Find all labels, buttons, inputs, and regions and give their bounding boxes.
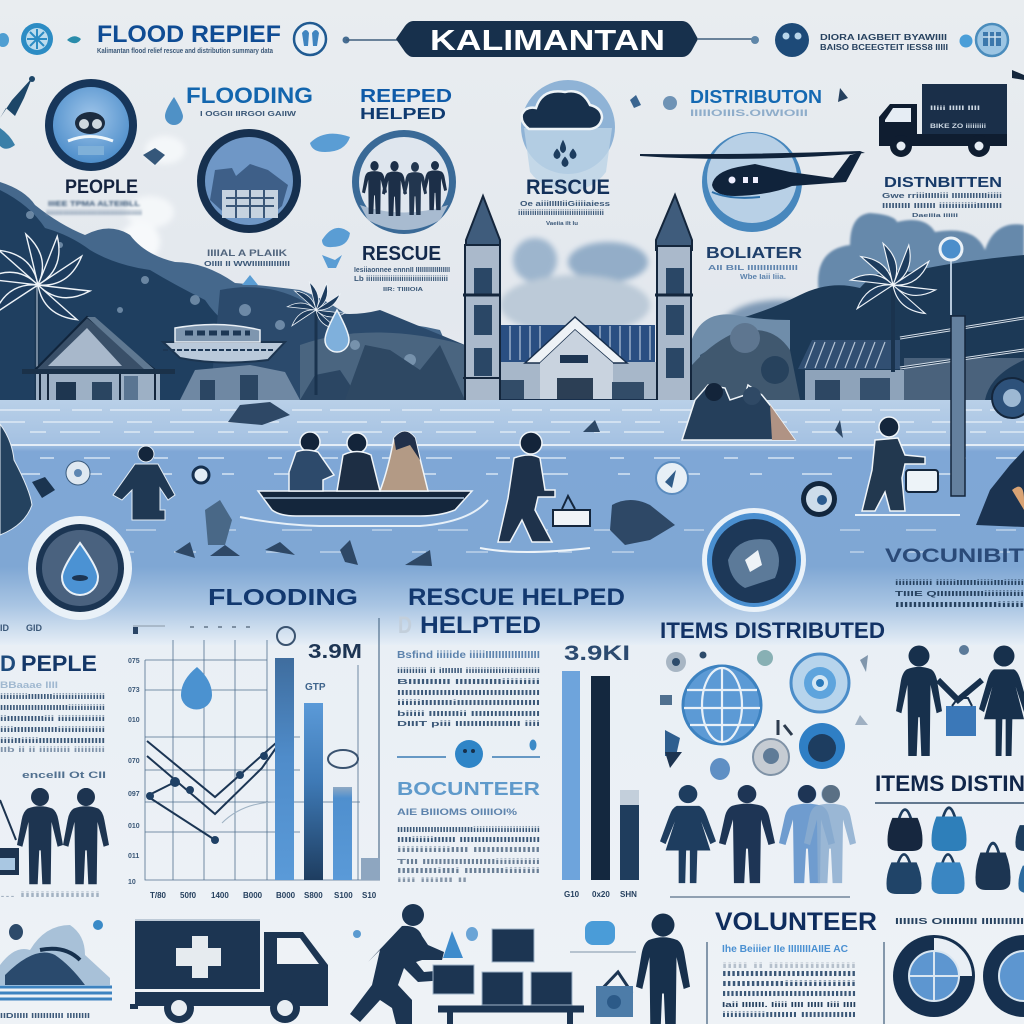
text: volunteer note: AII BIL IIIIIIIIIIIIIIII xyxy=(708,265,798,272)
text: rescue note xyxy=(354,267,450,293)
palm tree left xyxy=(0,232,90,400)
text: rescue helped detail xyxy=(397,650,540,728)
palm tree right xyxy=(850,241,936,372)
heading: helped: REEPED xyxy=(360,86,452,106)
icon: group of four people xyxy=(660,785,856,897)
hill mottling xyxy=(26,211,416,366)
icon: delivery truck top: BIKE ZO iiiiiiiii xyxy=(930,124,986,130)
text: volunteer detail: IIIIIIIIIIIIIIIIIIIIIIIIIiiiiiiiiiiiiiiiiiiiiii xyxy=(397,827,540,834)
text: people detail: IIIIIIIIIIIIIIIIIIIIIIiiiiiiiiiiii xyxy=(0,705,105,712)
text: people detail: BBaaae IIII xyxy=(0,680,58,690)
title: flood relief: FLOOD REPIEF xyxy=(97,21,281,48)
legend marks at left: GID xyxy=(26,623,43,633)
text: people detail: iiiiIIIIIIIIIIIIIiiiiiiiiiiiiii xyxy=(0,727,105,734)
icon: target disc cut xyxy=(983,935,1024,1017)
heading: distribution: DISTNBITTEN xyxy=(884,174,1002,191)
panel: people circle xyxy=(45,79,138,198)
text: volunteer note xyxy=(708,265,798,281)
text: people detail: IIb ii ii iiiiiiiii iiiiiiiii xyxy=(0,747,105,754)
text: rescue helped detail: iiiiiiIIIIIIIIiIIIIIIIIIIIIIIIIIIIII xyxy=(397,700,540,707)
icon: face badge xyxy=(775,23,809,57)
text: rescue helped detail: iiiiiiiiii ii iIIIIIII iiiiiiiiiiiiiiiiiiiiiiiii xyxy=(397,668,540,675)
chart y labels: 010 xyxy=(128,823,140,830)
chart y labels: 10 xyxy=(128,879,136,886)
icon: volunteer divider xyxy=(397,740,540,768)
text: volunteer banner: iiiiiiiiiii iiiiiiIIIIIIiiiiiIIIiiiiii xyxy=(895,580,1024,587)
right dark hills xyxy=(735,255,1024,405)
panel: flood water xyxy=(0,400,1024,645)
small icons xyxy=(660,650,868,780)
scene: buildings xyxy=(0,195,1024,402)
icon: standing volunteer xyxy=(636,914,690,1024)
text: volunteer banner: VOCUNIBIT xyxy=(885,546,1024,567)
icon: rain cloud xyxy=(521,80,615,191)
title banner xyxy=(396,21,698,57)
chart x labels: 50f0 xyxy=(180,891,197,900)
heading: volunteer: BOCUNTEER xyxy=(397,779,540,799)
chart: relief bars xyxy=(562,642,639,899)
icon: relief emblem xyxy=(294,23,326,55)
text: small caption: IIIIIIS OIIIIIIIII IIIIIIIIIII xyxy=(895,917,1024,926)
icon: delivery truck top xyxy=(879,84,1007,157)
icon: flooded city disc xyxy=(197,129,301,233)
panel: volunteer text: Iaii IIIIIII. Iiiii IIII IIIII Iiii IIII xyxy=(722,1002,856,1009)
chart x labels xyxy=(150,891,377,900)
icon: left kite ornaments xyxy=(0,76,35,149)
heading: helped: HELPED xyxy=(360,106,446,123)
text: volunteer banner: IIIIIIIIIIIIIIIIIIIIIIIiiiiii xyxy=(895,602,1024,609)
heading: volunteer: VOLUNTEER xyxy=(715,908,877,936)
icon: volunteer carrying parcels xyxy=(350,904,478,1024)
title banner: KALIMANTAN xyxy=(430,25,665,57)
bar labels: SHN xyxy=(620,890,637,899)
raft group xyxy=(682,383,795,440)
background landscape: hills and clouds xyxy=(0,136,1024,405)
icon: two volunteers xyxy=(0,788,109,884)
heading: distribution: IIIIIIIII IIIIIII iiiiiiiiiiiiIIIIIIII xyxy=(882,203,1002,210)
icon: water drop xyxy=(165,97,183,125)
heading: distribution: Gwe rriiiIIIIIiii IIIIIIIIIIIIiiiii xyxy=(882,193,1002,200)
icon: camera badge xyxy=(753,739,789,775)
heading: flooding: FLOODING xyxy=(186,83,313,108)
text: city note: OIIII II WWIIIIIIIIIIIIII xyxy=(204,261,290,268)
heading: helped xyxy=(360,86,452,123)
cloud puffs xyxy=(120,136,840,360)
header note xyxy=(820,33,948,52)
line markers xyxy=(146,730,288,844)
heading: distribution: IIIIIOIIIS.OIWIOIII xyxy=(690,108,808,118)
text: people detail: iiiiiiiiiIIIIIIIIiiiiiiiiiiiiiiiii xyxy=(0,694,105,701)
heading: people: PEPLE xyxy=(21,651,97,676)
right cloud bank xyxy=(818,213,1024,340)
small floating rings xyxy=(32,461,837,517)
connector left xyxy=(342,36,400,44)
icon: cargo emblem bottom left: IIDIIIII IIIIIIIIIII IIIIIIII xyxy=(0,1013,90,1020)
icon: drop on chart xyxy=(181,667,212,709)
house left xyxy=(22,317,175,402)
icon: blue dot and building badge xyxy=(960,24,1008,56)
wading man right xyxy=(855,417,960,515)
icon: relief bags xyxy=(886,808,1024,894)
chart y labels: 070 xyxy=(128,758,140,765)
bar labels xyxy=(564,890,637,899)
icon: relief seal badge xyxy=(702,508,806,612)
chart y labels: 075 xyxy=(128,658,140,665)
bar labels: G10 xyxy=(564,890,580,899)
floating blue shapes xyxy=(143,134,350,285)
text: volunteer detail xyxy=(397,807,540,884)
utility pole and lines xyxy=(900,238,1024,400)
icon: globe xyxy=(683,666,761,744)
text: city note: IIIIAL A PLAIIK xyxy=(207,248,288,258)
panel: helicopter disc xyxy=(640,132,865,281)
icon: target badge xyxy=(791,654,849,712)
line series xyxy=(147,735,285,840)
chart ornaments: GTP xyxy=(305,682,326,693)
panel: volunteer text: IIIIIIIIIIIIIIIIIIIIIIIIIIIII xyxy=(722,971,856,978)
person in boat centre xyxy=(337,433,380,491)
text: volunteer detail: iiii iiiiIII II xyxy=(397,878,468,884)
bar labels: 0x20 xyxy=(592,890,610,899)
icon: delivery truck top: IIiii IIIII IIII xyxy=(930,106,981,112)
chart x labels: S100 xyxy=(334,891,353,900)
icon: helicopter xyxy=(640,151,865,198)
debris patches xyxy=(175,402,843,566)
wading rescuer xyxy=(113,446,175,520)
panel: rescue circle xyxy=(352,130,456,293)
right market building xyxy=(798,340,905,402)
panel: volunteer text: iiiii ii iiiiiiiiiiiiiiiii xyxy=(722,963,856,970)
chart x labels: S800 xyxy=(304,891,323,900)
heading: items distributed: ITEMS DISTRIBUTED xyxy=(660,618,885,643)
rescue boat xyxy=(240,491,488,526)
church tower right xyxy=(655,195,693,402)
left edge wader xyxy=(0,424,32,535)
text: volunteer banner: TIIIE QIIIIIIIIIIIIIiiiiiiiiiii xyxy=(895,591,1024,598)
value label: 3.9KI xyxy=(564,642,630,665)
heading: flooding xyxy=(186,83,313,118)
icon: flood drop badge xyxy=(28,516,132,620)
header strip xyxy=(0,21,1008,57)
utility pole shaft xyxy=(951,316,965,496)
chart x labels: B000 xyxy=(243,891,263,900)
chart y labels: 010 xyxy=(128,717,140,724)
heading: people: D xyxy=(0,651,16,676)
icon: relief bag xyxy=(596,972,633,1017)
icon: cargo emblem bottom left xyxy=(0,920,112,1020)
panel: volunteer text: Ihe Beiiier IIe IIIIIIIIAIIE AC xyxy=(722,944,848,955)
right edge badge xyxy=(992,378,1024,418)
chart y labels: 073 xyxy=(128,687,140,694)
bars xyxy=(562,671,639,880)
chart: flood levels and bars xyxy=(128,618,380,900)
church tower left xyxy=(463,196,501,402)
bars xyxy=(275,658,380,880)
grove beyond church xyxy=(692,323,800,400)
small marks xyxy=(630,70,1024,110)
text: rescue note: Iesiiaonnee ennnII IIIIIIIIIIIIIIIIII xyxy=(354,267,450,274)
icon: water drop xyxy=(325,310,349,352)
moored boat xyxy=(163,324,285,363)
panel: volunteer text: IIIIIIIIIIIIIiiiiiiiiiiiiiii xyxy=(722,981,856,988)
text: volunteer note: Wbe Iaii Iiia. xyxy=(740,274,786,281)
header note: BAISO BCEEGTEIT IESS8 IIIII xyxy=(820,43,948,52)
text: volunteer detail: iiiiiiiiiiiiIIII IIIIIIIIIIIIIII xyxy=(397,847,540,854)
panel: rain cloud disc xyxy=(518,80,615,227)
chart x labels: T/80 xyxy=(150,891,167,900)
heading: rescue: RESCUE xyxy=(362,243,441,265)
chart grid xyxy=(145,618,380,880)
heading: volunteer: BOLIATER xyxy=(706,245,803,262)
text: people detail xyxy=(0,680,105,754)
chart x labels: S10 xyxy=(362,891,377,900)
heading: distribution: Daeiiia iiiiii xyxy=(912,213,959,219)
left mountains xyxy=(0,182,470,400)
panel: volunteer text: IIIIIIIIIIIIIIIIIIIIIIIIIIIIIIII xyxy=(722,991,856,998)
text: rescue note: Lb iiiiiiiiiiiiiiiiiiiiiiiiiiiiiiiiiiiii xyxy=(354,276,448,283)
chart y labels: 011 xyxy=(128,853,139,860)
text: volunteer detail: AIE BIIIOMS OIIIIOI% xyxy=(397,807,517,817)
heading: flooding: I OGGII IIRGOI GAIIW xyxy=(200,111,297,118)
right edge rescuers xyxy=(976,450,1024,527)
connector right xyxy=(698,36,759,44)
panel: relief icons xyxy=(660,650,868,780)
heading: rescue helped: RESCUE HELPED xyxy=(408,584,625,611)
legend marks at left xyxy=(0,623,250,634)
palm tree small xyxy=(287,281,345,395)
text: people note xyxy=(46,201,142,217)
text: rescue helped detail: IIIIIIIIIIIIIIIIIIIIIIIIIIIIIIIIIIIII xyxy=(397,690,540,697)
text: rescue helped detail: DIIIT piii IIIIIIIIIIIIIIIII iiii xyxy=(397,721,540,728)
wading man with parcel xyxy=(480,432,590,552)
icon: helicopter backdrop xyxy=(702,132,802,232)
header note: DIORA IAGBEIT BYAWIIII xyxy=(820,33,947,42)
text: rescue helped detail: BIIIIIIIIII IIIIIIIIIIIiiiiiiiii xyxy=(397,679,540,686)
chart y labels xyxy=(128,658,140,886)
text: rescue helped detail: Bsfind iiiiide iiiiiIIIIIIIIIIIIIIIII xyxy=(397,650,540,661)
heading: rescue helped: HELPTED xyxy=(420,612,541,639)
heading: distribution xyxy=(882,174,1002,219)
right edge roof xyxy=(985,360,1024,400)
small accent marks xyxy=(0,33,81,47)
heading: people: PEOPLE xyxy=(65,177,138,198)
chart x labels: B000 xyxy=(276,891,296,900)
text: volunteer banner xyxy=(885,546,1024,609)
value label: 3.9M xyxy=(308,641,362,663)
icon: target disc xyxy=(893,935,975,1017)
chart x labels: 1400 xyxy=(211,891,229,900)
icon: parcels on table xyxy=(433,921,636,1024)
person in boat left xyxy=(289,432,334,491)
icon: blue badge xyxy=(799,723,845,769)
scene: rescue people xyxy=(0,383,1024,552)
text: rescue note xyxy=(518,201,610,227)
chart ornaments xyxy=(277,627,358,768)
text: people detail: iiIIIIIIIIIIIiii iiiiiiiiiiiiii xyxy=(0,716,105,723)
text: volunteer detail: IIIIiiiiiiIIIIII IIIIIIIIIIIIIIIIIIIIII xyxy=(397,837,540,844)
icon: helpers disc xyxy=(352,130,456,234)
title: flood relief: Kalimantan flood relief rescue and distribution summary data xyxy=(97,48,273,55)
text: rescue helped detail: biiiii IIIIIIIIii IIIIIIIIIIIIIIIIII xyxy=(397,711,540,718)
heading: distribution xyxy=(690,87,822,118)
heading: rescue: RESCUE xyxy=(526,176,610,199)
text: small caption: enceIII Ot CII xyxy=(22,770,106,780)
text: rescue note: Vaeiia iIt Iu xyxy=(546,221,578,227)
text: rescue note: iiiiiiiiiiiiiiiiiiiiiiiiiiiiiiiiiiiii xyxy=(518,210,604,217)
rubble under boat xyxy=(180,345,465,400)
text: volunteer detail: TIII IIIIIIIIIIIIIIIIIIiiiiiiiiiii xyxy=(397,859,540,866)
panel: volunteer text: iiiiiiiiiiiIIIIIIII IIIIIIIIIIIIII xyxy=(722,1012,856,1019)
icon: relief truck bottom xyxy=(130,920,328,1023)
heading: items distributed cut: ITEMS DISTIN xyxy=(875,771,1024,796)
chart y labels: 097 xyxy=(128,791,140,798)
text: people caption: ... iiiiiiiiiiiiiiii xyxy=(0,892,100,899)
text: people note: IIIEE TPMA ALTEIBLL xyxy=(48,201,141,208)
legend marks at left: ID xyxy=(0,623,10,633)
icon: volunteers with relief bag xyxy=(896,645,1024,756)
heading: distribution: DISTRIBUTON xyxy=(690,87,822,107)
person in boat right xyxy=(380,432,428,491)
icon: snow emblem left xyxy=(21,23,53,55)
heading: rescue helped xyxy=(398,584,625,639)
text: rescue note: Oe aiiiIIIIIiiGiiiiaiess xyxy=(520,201,610,208)
text: people note: iiiiiiiiiiiiiiiiiiiiiiiiiiiiiiiiiiiiiiiiiiiii xyxy=(46,210,142,217)
panel: volunteer text xyxy=(707,942,884,1024)
text: rescue note: IIR: TIIIIOIA xyxy=(383,287,424,293)
heading: rescue helped: D xyxy=(398,612,412,639)
text: city note xyxy=(204,248,290,268)
icon: people disc xyxy=(45,79,137,171)
panel: flooding circle xyxy=(197,129,301,268)
text: people detail: iiiiIIiiiiiIIIIIIIIIIIIIIIIIII xyxy=(0,738,105,745)
text: volunteer detail: IIIIIIIIIiIIIi IIIIIIIIIiiiiiiii xyxy=(397,868,540,875)
heading: flooding: FLOODING xyxy=(208,584,358,610)
church central hall xyxy=(494,317,656,400)
